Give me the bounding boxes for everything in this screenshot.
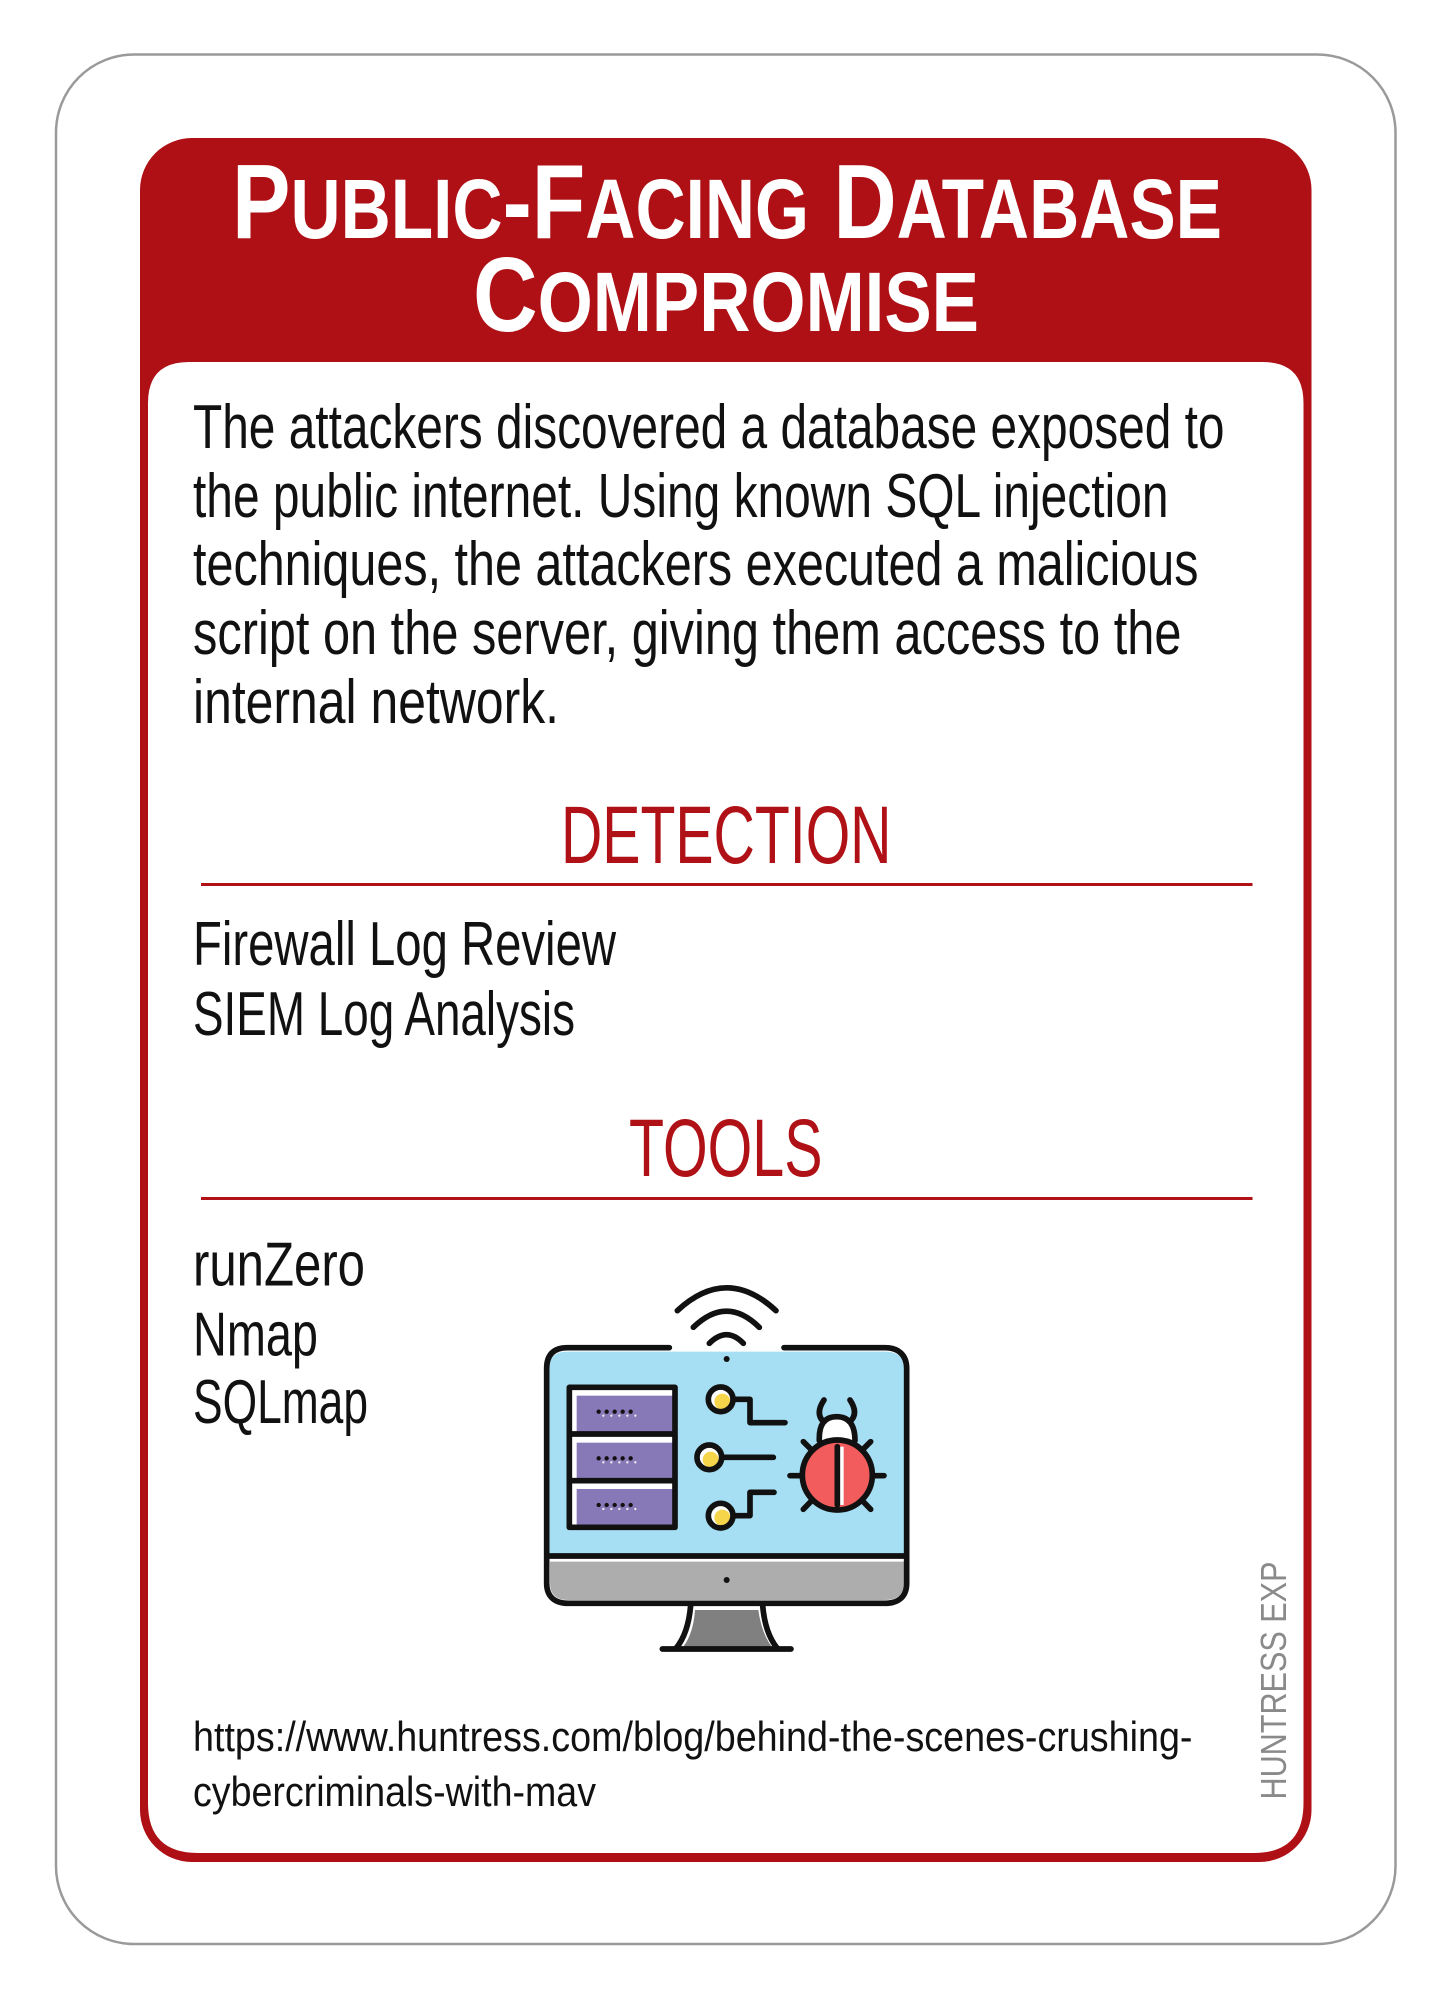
server rack <box>569 1387 675 1527</box>
source url: cybercriminals-with-mav <box>193 1768 596 1815</box>
detection list <box>193 910 616 1049</box>
description text: techniques, the attackers executed a malicious <box>193 530 1198 599</box>
tools list <box>193 1230 368 1437</box>
tools list: SQLmap <box>193 1368 368 1437</box>
source url <box>193 1713 1192 1815</box>
tools list: runZero <box>193 1230 365 1300</box>
icon: monitor with server, circuit and bug <box>547 1288 907 1649</box>
description text: the public internet. Using known SQL injection <box>193 462 1168 531</box>
source url: https://www.huntress.com/blog/behind-the-scenes-crushing- <box>193 1713 1192 1760</box>
description text: internal network. <box>193 668 559 737</box>
description text: script on the server, giving them access to the <box>193 599 1182 668</box>
title <box>232 143 1222 354</box>
description text <box>193 393 1224 737</box>
tools list: Nmap <box>193 1300 318 1370</box>
title: COMPROMISE <box>473 236 979 354</box>
monitor outline <box>547 1348 907 1649</box>
wifi arcs <box>677 1288 776 1343</box>
detection list: SIEM Log Analysis <box>193 980 575 1049</box>
circuit nodes <box>697 1387 785 1528</box>
panel: red card frame <box>140 138 1312 1862</box>
title: PUBLIC-FACING DATABASE <box>232 143 1222 261</box>
vertical label: HUNTRESS EXP <box>1253 1562 1294 1800</box>
heading: detection: DETECTION <box>561 790 892 881</box>
heading: tools: TOOLS <box>629 1103 822 1194</box>
panel: white content area <box>148 362 1304 1853</box>
bug <box>790 1400 884 1510</box>
detection list: Firewall Log Review <box>193 910 616 979</box>
screen and base fills <box>548 1352 905 1555</box>
